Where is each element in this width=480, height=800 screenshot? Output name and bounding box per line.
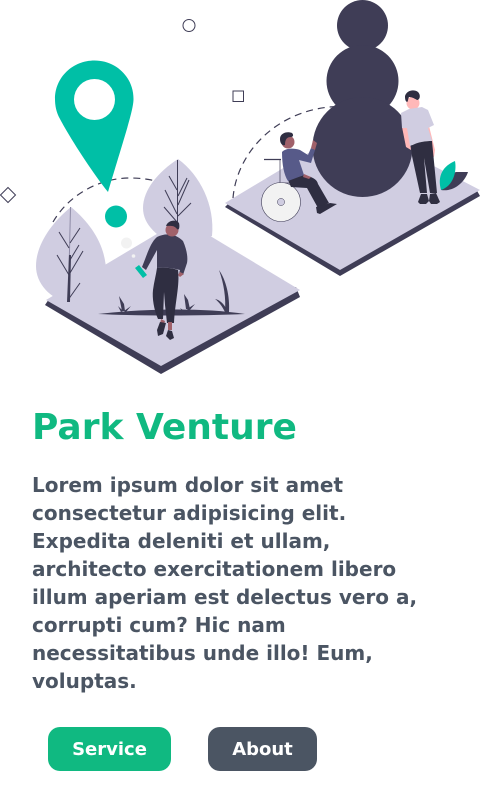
location pin <box>55 60 134 192</box>
decorative outline circle <box>183 20 195 32</box>
decorative outline square <box>233 91 244 102</box>
button: service <box>48 727 171 771</box>
button: about: About <box>232 739 293 760</box>
head <box>282 136 294 148</box>
dark stacked trees <box>312 0 412 197</box>
right platform <box>225 125 480 276</box>
decorative outline diamond <box>0 188 16 202</box>
left leaf tree <box>36 207 106 303</box>
right leaf tree <box>143 159 212 246</box>
torso and arms <box>142 234 187 275</box>
phone <box>135 265 147 278</box>
paragraph: Lorem ipsum dolor sit amet consectetur adipisicing elit. Expedita deleniti et ullam, architecto exercitationem libero illum aperiam est delectus vero a, corrupti cum? Hic nam necessitatibus unde illo! Eum, voluptas. <box>32 473 417 693</box>
legs <box>288 175 329 208</box>
plant by man <box>440 161 468 190</box>
illustration <box>0 0 480 374</box>
wheelchair <box>262 160 300 222</box>
teal dot <box>105 206 127 228</box>
left platform <box>45 219 300 374</box>
torso and arm <box>282 148 315 181</box>
button: about <box>208 727 317 771</box>
title: Park Venture <box>32 407 297 448</box>
dashed arc right <box>233 106 338 198</box>
head <box>166 224 178 236</box>
standing man <box>401 90 440 204</box>
legs <box>153 268 178 323</box>
button: service: Service <box>72 739 147 760</box>
dashed arc left <box>53 178 182 222</box>
pale dots <box>121 238 135 258</box>
ground grass <box>98 270 245 316</box>
walking man <box>135 221 187 340</box>
person in wheelchair <box>262 132 337 222</box>
